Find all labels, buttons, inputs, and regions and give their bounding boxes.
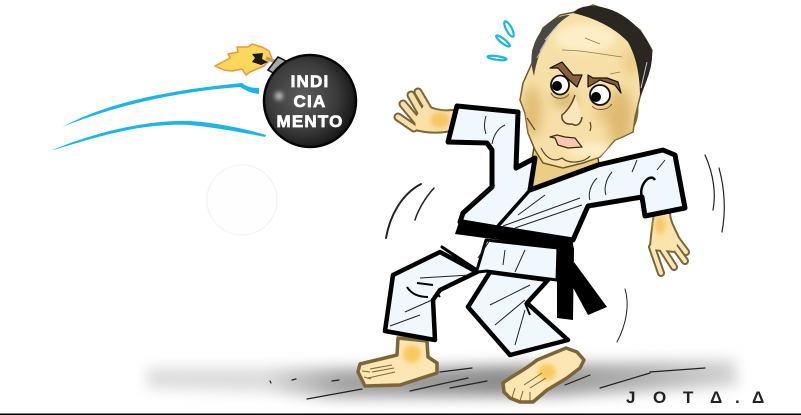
karate man: [358, 5, 686, 402]
signature: J: [626, 388, 635, 407]
highlight: [275, 92, 283, 100]
sweat drops: [487, 20, 515, 61]
forehead wrinkles: [562, 38, 622, 74]
head: [520, 5, 652, 168]
gi folds: [390, 116, 665, 345]
neck: [527, 140, 600, 193]
bomb: [215, 44, 356, 147]
bomb body: [264, 55, 356, 147]
face shading: [523, 24, 640, 157]
signature: T: [683, 388, 694, 407]
gi sleeve cuff curl: [641, 178, 655, 197]
hair left: [531, 15, 570, 76]
gi rear leg: [385, 252, 477, 340]
bomb cap: [268, 57, 290, 78]
right eye: [590, 85, 610, 105]
signature: .: [735, 388, 740, 407]
blue motion lines: [50, 83, 266, 151]
eye bags: [551, 93, 612, 110]
left eye: [551, 76, 569, 94]
gi jacket: [448, 106, 685, 240]
bottom rule: [0, 414, 801, 415]
faint circle: [207, 165, 277, 235]
front hand: [650, 212, 686, 273]
gi leg creases: [407, 283, 530, 315]
gi collar: [498, 190, 530, 226]
fuse flame: [215, 44, 279, 75]
bomb label: INDI: [291, 72, 329, 91]
bomb label: CIA: [294, 92, 326, 111]
black belt: [455, 219, 574, 250]
ground shadow: [147, 360, 738, 398]
signature: O: [653, 388, 666, 407]
signature: Δ: [752, 388, 764, 407]
left eyebrow: [550, 62, 582, 87]
face: [520, 5, 652, 168]
rear foot: [358, 338, 437, 386]
signature: Δ: [710, 388, 722, 407]
mouth: [550, 135, 582, 148]
ear: [612, 96, 637, 137]
jowl lines: [527, 118, 591, 162]
nose: [562, 95, 582, 125]
belt tails: [557, 248, 607, 320]
gi skirt: [442, 240, 558, 280]
hair right: [573, 6, 652, 97]
right eyebrow: [588, 75, 621, 93]
bomb label: [276, 72, 344, 131]
bomb label: MENTO: [276, 112, 344, 131]
motion lines: [270, 155, 724, 399]
rear hand: [398, 92, 458, 133]
gi front leg: [468, 272, 568, 355]
front foot: [503, 348, 584, 402]
